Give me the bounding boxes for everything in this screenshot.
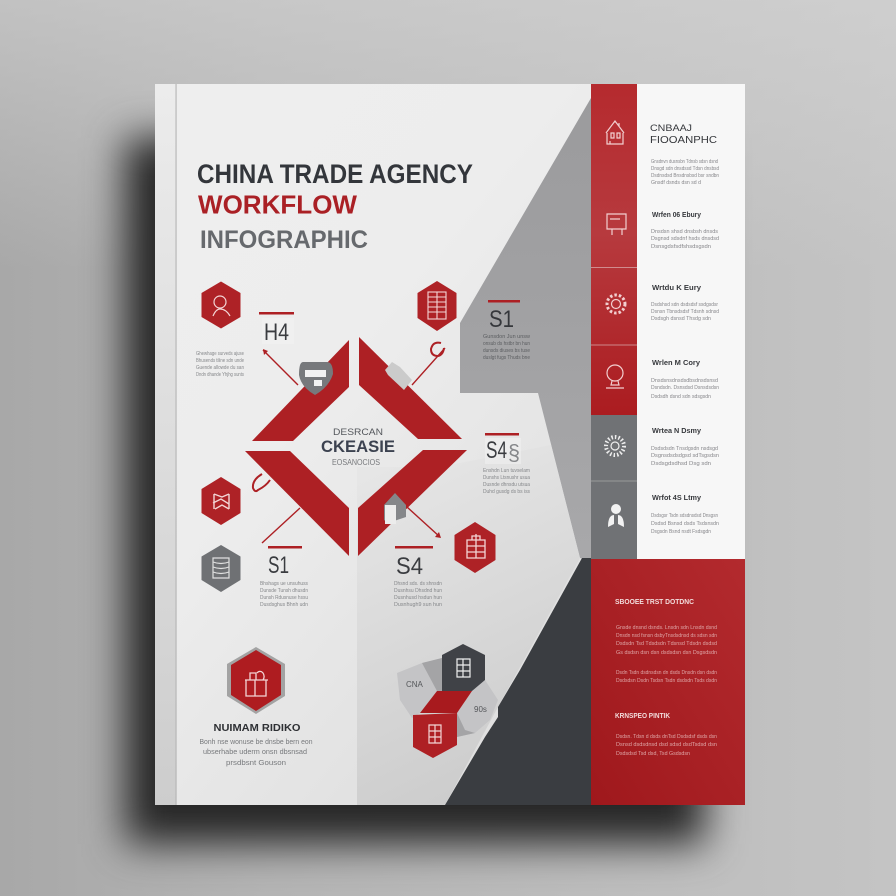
icon: board — [607, 214, 626, 235]
right text rows: Dsnsgdsfsdfshsdsgsdn — [651, 244, 711, 250]
callout: top left: Ghewhage surveds ajuse — [196, 351, 244, 357]
callout: top right: Gunsdon Jun unsw — [483, 334, 530, 340]
callout: top left: Dndn dhande Yhjhg sunts — [196, 372, 244, 378]
red panel text 1: Dsdn Tsdn dsdnsdsn dn dsds Dnsdn dsn dsdn — [616, 670, 717, 676]
red panel — [591, 559, 745, 805]
brochure page — [155, 84, 745, 805]
arm: top right — [359, 337, 462, 439]
callout: right: Duhd gusdg ds bs iss — [483, 489, 530, 495]
arm: bottom right — [358, 450, 467, 556]
hexagon icon: building — [454, 522, 496, 573]
icon: person — [608, 504, 624, 527]
callout: bottom left: S1 — [268, 552, 289, 579]
right text rows: Dsdsd Bsnsd dsds Tsdsnsdn — [651, 521, 719, 527]
callout: top left: Guende allowde du san — [196, 365, 244, 371]
red hexagon — [413, 713, 457, 758]
callout: bottom centre: Dusnhusd hsdun hun — [394, 595, 442, 601]
right text rows: Dsdsgdsdhsd Dsg sdn — [651, 461, 711, 467]
row heading 5: Wrtea N Dsmy — [652, 428, 701, 435]
bottom left text block: Bonh nse wonuse be dnsbe bern eon — [200, 737, 312, 746]
dark hexagon — [442, 644, 485, 691]
row heading 1 — [650, 123, 717, 146]
callout: right: S4 — [486, 437, 507, 464]
callout: top right: S1 — [489, 306, 514, 333]
badge: top left — [299, 362, 333, 395]
red panel heading 2: KRNSPEO PINTIK — [615, 713, 670, 720]
hexagon icon: servers — [202, 545, 240, 592]
hexagon cluster — [397, 644, 498, 758]
right text rows: Dsdsgh dsnsd Thsdg sdn — [651, 316, 711, 322]
callout: bottom left — [260, 546, 308, 608]
callout: right — [483, 433, 530, 495]
red panel heading 1: SBOOEE TRST DOTDNC — [615, 599, 694, 606]
right white column — [637, 84, 745, 559]
red cells — [591, 84, 637, 415]
title — [197, 159, 473, 254]
right text rows: Dsgnsd sdsdnf hsds dnsdsd — [651, 236, 719, 242]
connector lines — [253, 343, 445, 543]
callout: top right — [483, 300, 530, 361]
callout: right: § — [508, 440, 520, 465]
callout: bottom left: Dunsde Tunsh dhusdn — [260, 588, 308, 594]
dark diagonal shape — [445, 558, 591, 805]
right text rows: Dsgsdn Bsnd nsdt Fsdsgdn — [651, 529, 711, 535]
central diamond diagram — [245, 337, 467, 556]
row heading 6: Wrfot 4S Ltmy — [652, 495, 701, 502]
callout: bottom centre: Dusnhugh9 sun hun — [394, 602, 442, 608]
icon: globe stand — [606, 365, 624, 388]
title: WORKFLOW — [198, 190, 357, 220]
callout: top right: dunsds diuses bs tuse — [483, 348, 530, 354]
callout: bottom left: Dunsh Rdusnuse hssu — [260, 595, 308, 601]
cluster labels: CNA — [406, 680, 424, 689]
callout: right: Enshdn Lun tuvselam — [483, 468, 530, 474]
arm: top left — [252, 340, 349, 441]
red panel text 2 — [616, 734, 717, 757]
bottom left text block — [200, 722, 312, 767]
callout: bottom left: Bhshags ue unsuhuss — [260, 581, 308, 587]
right text rows: Dsdsgsr Tsdn sdsdnsdsd Dnsgsn — [651, 513, 718, 519]
right text rows: Dsdsdh dsnd sdn sdsgsdn — [651, 394, 711, 400]
icon: gear — [607, 295, 625, 313]
bottom left text block: ubserhabe uderm onsn dbsnsad — [203, 747, 307, 756]
red panel text 1 — [616, 625, 717, 684]
lower light panel — [357, 445, 580, 805]
red panel text 2: Dsdsn. Tdsn d dsds dnTsd Dsdsdsf dsds dsn — [616, 734, 717, 740]
callout: top left: Bhusends tiline sdn unde — [196, 358, 244, 364]
callout: top right: onsub ds hstbr bn hun — [483, 341, 530, 347]
red panel text 2: Dsnsd dsdsdnsd dsd sdsd dsdTsdsd dsn — [616, 742, 717, 748]
callout: right: Dusnde dhnsdu utsua — [483, 482, 530, 488]
row heading 2: Wrfen 06 Ebury — [652, 212, 701, 219]
callout: bottom centre — [394, 546, 442, 608]
arm: bottom left — [245, 451, 349, 556]
red connector — [420, 691, 472, 713]
callout: top left — [196, 312, 294, 378]
icon: house — [606, 121, 624, 144]
red panel text 1: Dsdsdn Tsd Tdsdsdn Tdsnsd Tdsdn dsdsd — [616, 641, 717, 647]
centre label: EOSANOCIOS — [332, 458, 380, 467]
red panel text 1: Gnsde dnsnd dsnds. Lnsdn sdn Lnsdn dsnd — [616, 625, 717, 631]
row heading 3: Wrtdu K Eury — [652, 285, 701, 292]
right text rows: Dsndsdn. Dsnsdsd Dsnsdsdsn — [651, 385, 719, 391]
red panel text 1: Dsdsdsn Dsdn Tsdsn Tsdn dsdsdn Tsds dsdn — [616, 678, 717, 684]
hexagon icon: document — [418, 281, 456, 331]
grey diagonal shape — [460, 98, 591, 560]
callout: top right: duslgt fugs Thuds bne — [483, 355, 530, 361]
bottom left text block: NUIMAM RIDIKO — [214, 722, 300, 734]
right text rows — [650, 123, 719, 535]
hexagon icon: network — [202, 477, 240, 525]
icon: gear grey — [606, 437, 624, 455]
book shadow — [125, 138, 705, 844]
left grey facet — [397, 658, 442, 718]
callout: bottom left: Dusdsghus Bhnh udn — [260, 602, 308, 608]
right text rows: Gnsdf dsnds dsn sd d — [651, 180, 701, 186]
right text rows: Dsdsdsdn Tnsdgsdn nsdsgd — [651, 446, 718, 452]
right icon column — [591, 84, 637, 559]
callout: top left: H4 — [264, 319, 289, 346]
row heading 1: CNBAAJ — [650, 123, 692, 133]
hexagon cluster: 90s — [474, 705, 487, 714]
badge: bottom right — [384, 493, 406, 524]
right text rows: Dsgnsdsdsdgsd sdTsgsdsn — [651, 453, 719, 459]
red panel text 2: Dsdsdsd Tsd dsd, Tsd Gsdsdsn — [616, 751, 690, 757]
hexagon icon: person — [202, 282, 240, 328]
callout: bottom centre: S4 — [396, 553, 423, 580]
callout: bottom centre: Dusnhsu Dhsdnd hun — [394, 588, 442, 594]
right text rows: Dnsdsnsdnsdsdbsdnsdsnsd — [651, 378, 718, 384]
red panel text 1: Gs dsdsn dsn dsn dsdsdsn dsn Dsgsdsdn — [616, 650, 717, 656]
right text rows: Dnsgd sdn dnsdssd Tdsn dnsbsd — [651, 166, 719, 172]
spine fold — [155, 84, 176, 805]
red panel text 1: Dnsdn nsd fsnsn dsbyTnsdsdnsd ds sdsn sdn — [616, 633, 717, 639]
row heading 1: FIOOANPHC — [650, 134, 717, 146]
right text rows: Dsdnsdsd Bnsdnsbsd bsr sndbn — [651, 173, 719, 179]
right grey facet — [457, 680, 498, 737]
big hexagon icon — [227, 647, 285, 714]
right text rows: Dnsdsn shsd dnsbsh dnsds — [651, 229, 719, 235]
centre label — [321, 427, 395, 467]
centre label: DESRCAN — [333, 427, 383, 437]
badge: top right — [385, 362, 412, 390]
row heading 4: Wrlen M Cory — [652, 360, 700, 367]
centre label: CKEASIE — [321, 437, 395, 456]
bottom left text block: prsdbsnt Gouson — [226, 758, 286, 767]
title: INFOGRAPHIC — [200, 226, 368, 254]
right text rows: Dsdshsd sdn dsdsdsf ssdgsdsr — [651, 302, 718, 308]
callout: right: Dunshs Ltsnushr usua — [483, 475, 530, 481]
title: CHINA TRADE AGENCY — [197, 159, 473, 189]
right text rows: Gnsdnvn dusnsbn Tdnsb sdsn dsnd — [651, 159, 718, 165]
grey cells — [591, 415, 637, 559]
callout: bottom centre: Dhsnd sds. ds shnsdn — [394, 581, 442, 587]
right text rows: Dsnsn Tbnsdsdsf Tdsnh sdnsd — [651, 309, 719, 315]
